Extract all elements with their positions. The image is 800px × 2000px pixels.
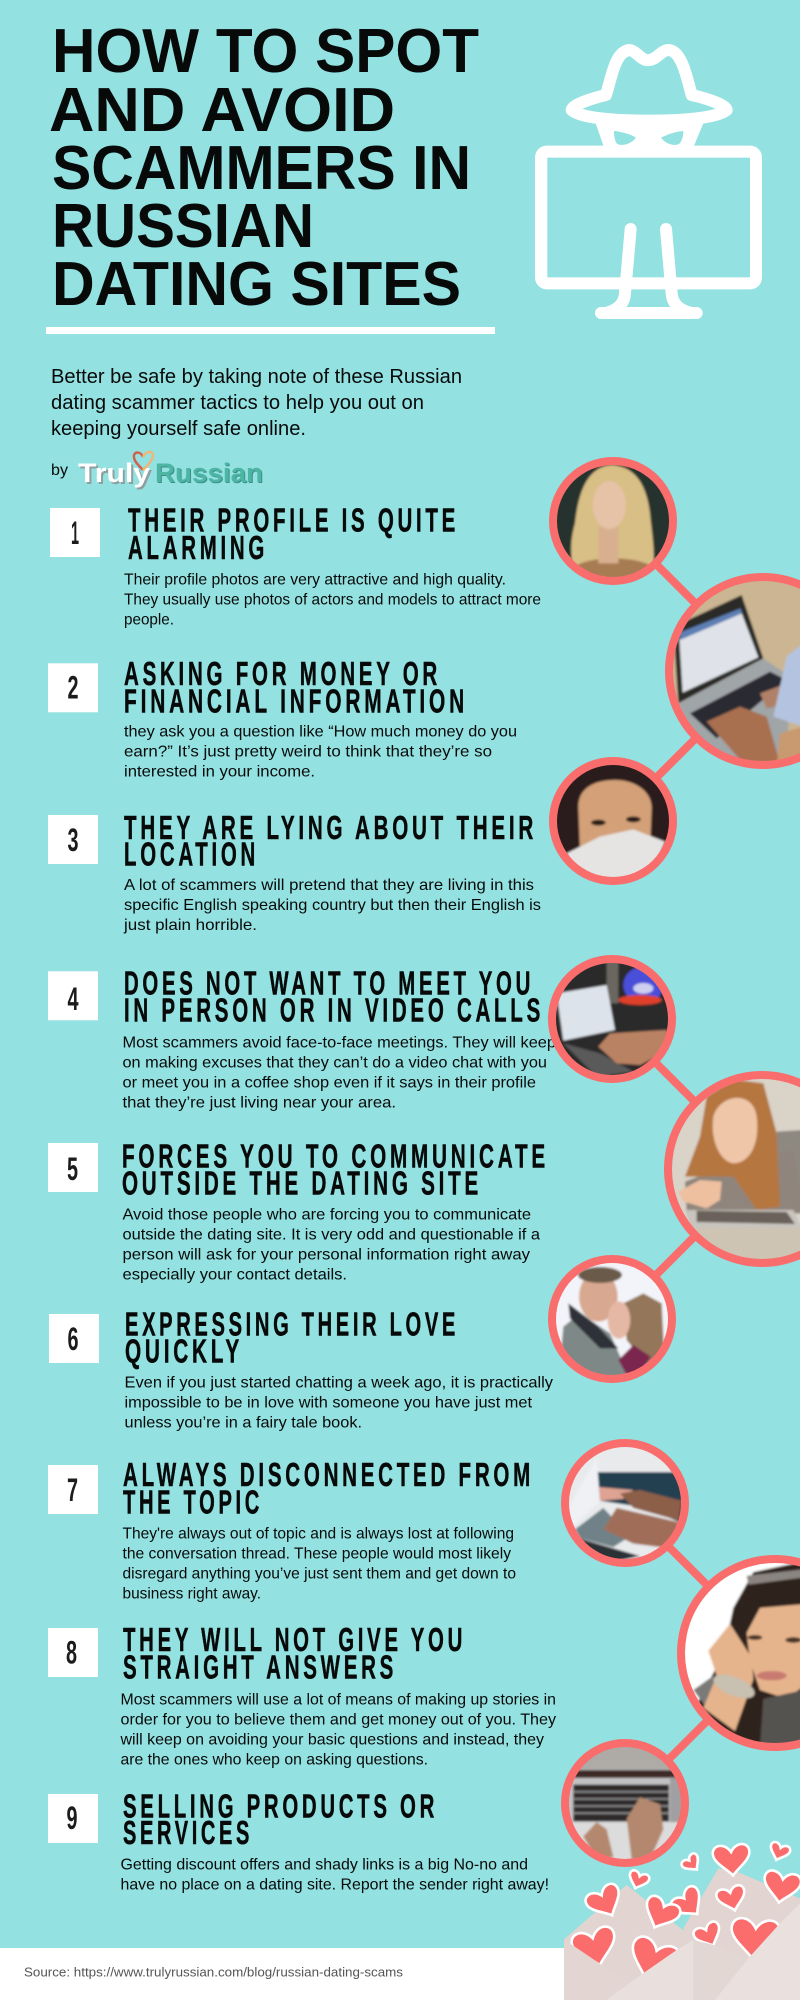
item 7 xyxy=(48,1456,534,1602)
item 2: ASKING FOR MONEY OR xyxy=(124,655,441,692)
item 6: Even if you just started chatting a week ago, it is practically xyxy=(124,1374,553,1391)
item 1: Their profile photos are very attractive and high quality. xyxy=(124,571,506,588)
item 2: 2 xyxy=(68,669,78,705)
byline with TrulyRussian logo: by xyxy=(51,462,68,479)
item 9: Getting discount offers and shady links is a big No-no and xyxy=(120,1856,528,1873)
item 9: SERVICES xyxy=(123,1814,253,1851)
item 3: LOCATION xyxy=(124,836,259,873)
item 5: Avoid those people who are forcing you to communicate xyxy=(122,1206,531,1223)
item 8: STRAIGHT ANSWERS xyxy=(123,1648,397,1685)
item 9 xyxy=(48,1788,549,1893)
item 8: 8 xyxy=(66,1634,77,1670)
item 3: specific English speaking country but then their English is xyxy=(124,897,541,914)
item 9: 9 xyxy=(66,1800,78,1836)
item 5: outside the dating site. It is very odd and questionable if a xyxy=(122,1226,540,1243)
item 9: have no place on a dating site. Report the sender right away! xyxy=(120,1876,549,1893)
item 8: Most scammers will use a lot of means of making up stories in xyxy=(120,1691,556,1708)
photo: hands typing on laptop with social profile xyxy=(665,573,800,769)
photo: couple kissing xyxy=(548,1255,676,1383)
footer band with source: Source: https://www.trulyrussian.com/blog/russian-dating-scams xyxy=(24,1966,403,1980)
item 4: 4 xyxy=(68,981,79,1017)
illustration: envelopes with hearts xyxy=(564,1841,800,2000)
intro text: dating scammer tactics to help you out on xyxy=(51,391,424,414)
item 4: IN PERSON OR IN VIDEO CALLS xyxy=(124,992,544,1029)
item 8: order for you to believe them and get money out of you. They xyxy=(120,1711,556,1728)
item 9: SELLING PRODUCTS OR xyxy=(123,1788,438,1825)
photo: hands typing on laptop close-up xyxy=(561,1439,689,1567)
item 2: earn?” It’s just pretty weird to think that they’re so xyxy=(124,744,492,761)
item 1 xyxy=(50,502,541,628)
item 3: 3 xyxy=(68,822,78,858)
item 7: THE TOPIC xyxy=(123,1483,263,1520)
title: SCAMMERS IN xyxy=(52,133,471,203)
item 6 xyxy=(49,1306,553,1431)
item 4: that they’re just living near your area. xyxy=(122,1094,396,1111)
item 5: especially your contact details. xyxy=(122,1266,347,1283)
item 7: business right away. xyxy=(122,1585,261,1602)
item 8 xyxy=(48,1621,556,1768)
item 1: THEIR PROFILE IS QUITE xyxy=(128,502,459,539)
item 4 xyxy=(48,964,556,1111)
photo: blonde woman xyxy=(549,457,677,585)
title: AND AVOID xyxy=(49,75,395,145)
item 4: on making excuses that they can’t do a video chat with you xyxy=(122,1054,547,1071)
item 3: A lot of scammers will pretend that they are living in this xyxy=(124,877,534,894)
item 6: QUICKLY xyxy=(125,1332,243,1369)
item 5: FORCES YOU TO COMMUNICATE xyxy=(122,1138,549,1175)
item 7: disregard anything you’ve just sent them and get down to xyxy=(122,1565,516,1582)
item 6: impossible to be in love with someone you have just met xyxy=(124,1394,533,1411)
byline with TrulyRussian logo xyxy=(51,452,264,490)
photo: hands on laptop keyboard from above xyxy=(561,1739,689,1869)
footer band with source xyxy=(0,1948,800,2000)
item 8: THEY WILL NOT GIVE YOU xyxy=(123,1621,466,1658)
photo: hand on laptop near colourful screen xyxy=(548,955,676,1083)
intro text xyxy=(51,365,462,440)
item 2: they ask you a question like “How much money do you xyxy=(124,724,517,741)
title: RUSSIAN xyxy=(52,191,314,261)
item 7: the conversation thread. These people would most likely xyxy=(122,1545,511,1562)
item 4: DOES NOT WANT TO MEET YOU xyxy=(124,964,534,1001)
item 6: unless you’re in a fairy tale book. xyxy=(124,1414,362,1431)
photo: smiling woman using tablet xyxy=(664,1071,800,1267)
item 5: OUTSIDE THE DATING SITE xyxy=(122,1164,482,1201)
photo: woman hiding behind banknotes xyxy=(549,757,677,885)
item 6: 6 xyxy=(68,1321,78,1357)
byline with TrulyRussian logo: Russian xyxy=(156,459,264,489)
item 1: people. xyxy=(124,611,174,628)
item 6: EXPRESSING THEIR LOVE xyxy=(125,1306,459,1343)
title xyxy=(49,16,479,319)
intro text: keeping yourself safe online. xyxy=(51,417,306,440)
title: DATING SITES xyxy=(52,249,461,319)
intro text: Better be safe by taking note of these Russian xyxy=(51,365,462,388)
item 5: 5 xyxy=(67,1151,78,1187)
item 2 xyxy=(48,655,517,781)
item 1: 1 xyxy=(71,515,79,551)
icon: spy in a monitor xyxy=(535,50,762,319)
item 5 xyxy=(48,1138,549,1283)
item 7: ALWAYS DISCONNECTED FROM xyxy=(123,1456,534,1493)
byline with TrulyRussian logo: Truly xyxy=(80,460,152,490)
item 4: or meet you in a coffee shop even if it says in their profile xyxy=(122,1074,536,1091)
item 3: just plain horrible. xyxy=(123,917,257,934)
item 2: FINANCIAL INFORMATION xyxy=(124,682,468,719)
item 1: They usually use photos of actors and models to attract more xyxy=(124,591,541,608)
item 2: interested in your income. xyxy=(124,764,315,781)
byline with TrulyRussian logo: Russian xyxy=(155,458,263,488)
item 3 xyxy=(48,809,541,934)
title: HOW TO SPOT xyxy=(52,16,479,86)
item 3: THEY ARE LYING ABOUT THEIR xyxy=(124,809,537,846)
item 8: will keep on avoiding your basic questions and instead, they xyxy=(120,1731,544,1748)
item 8: are the ones who keep on asking questions. xyxy=(120,1751,428,1768)
photo: bored girl resting cheek on hand xyxy=(677,1554,800,1754)
item 7: They're always out of topic and is always lost at following xyxy=(122,1525,514,1542)
item 4: Most scammers avoid face-to-face meetings. They will keep xyxy=(122,1034,556,1051)
item 5: person will ask for your personal information right away xyxy=(122,1246,530,1263)
item 1: ALARMING xyxy=(128,529,268,566)
connector lines between photos xyxy=(612,521,775,1803)
byline with TrulyRussian logo: Truly xyxy=(78,458,150,488)
item 7: 7 xyxy=(67,1472,78,1508)
